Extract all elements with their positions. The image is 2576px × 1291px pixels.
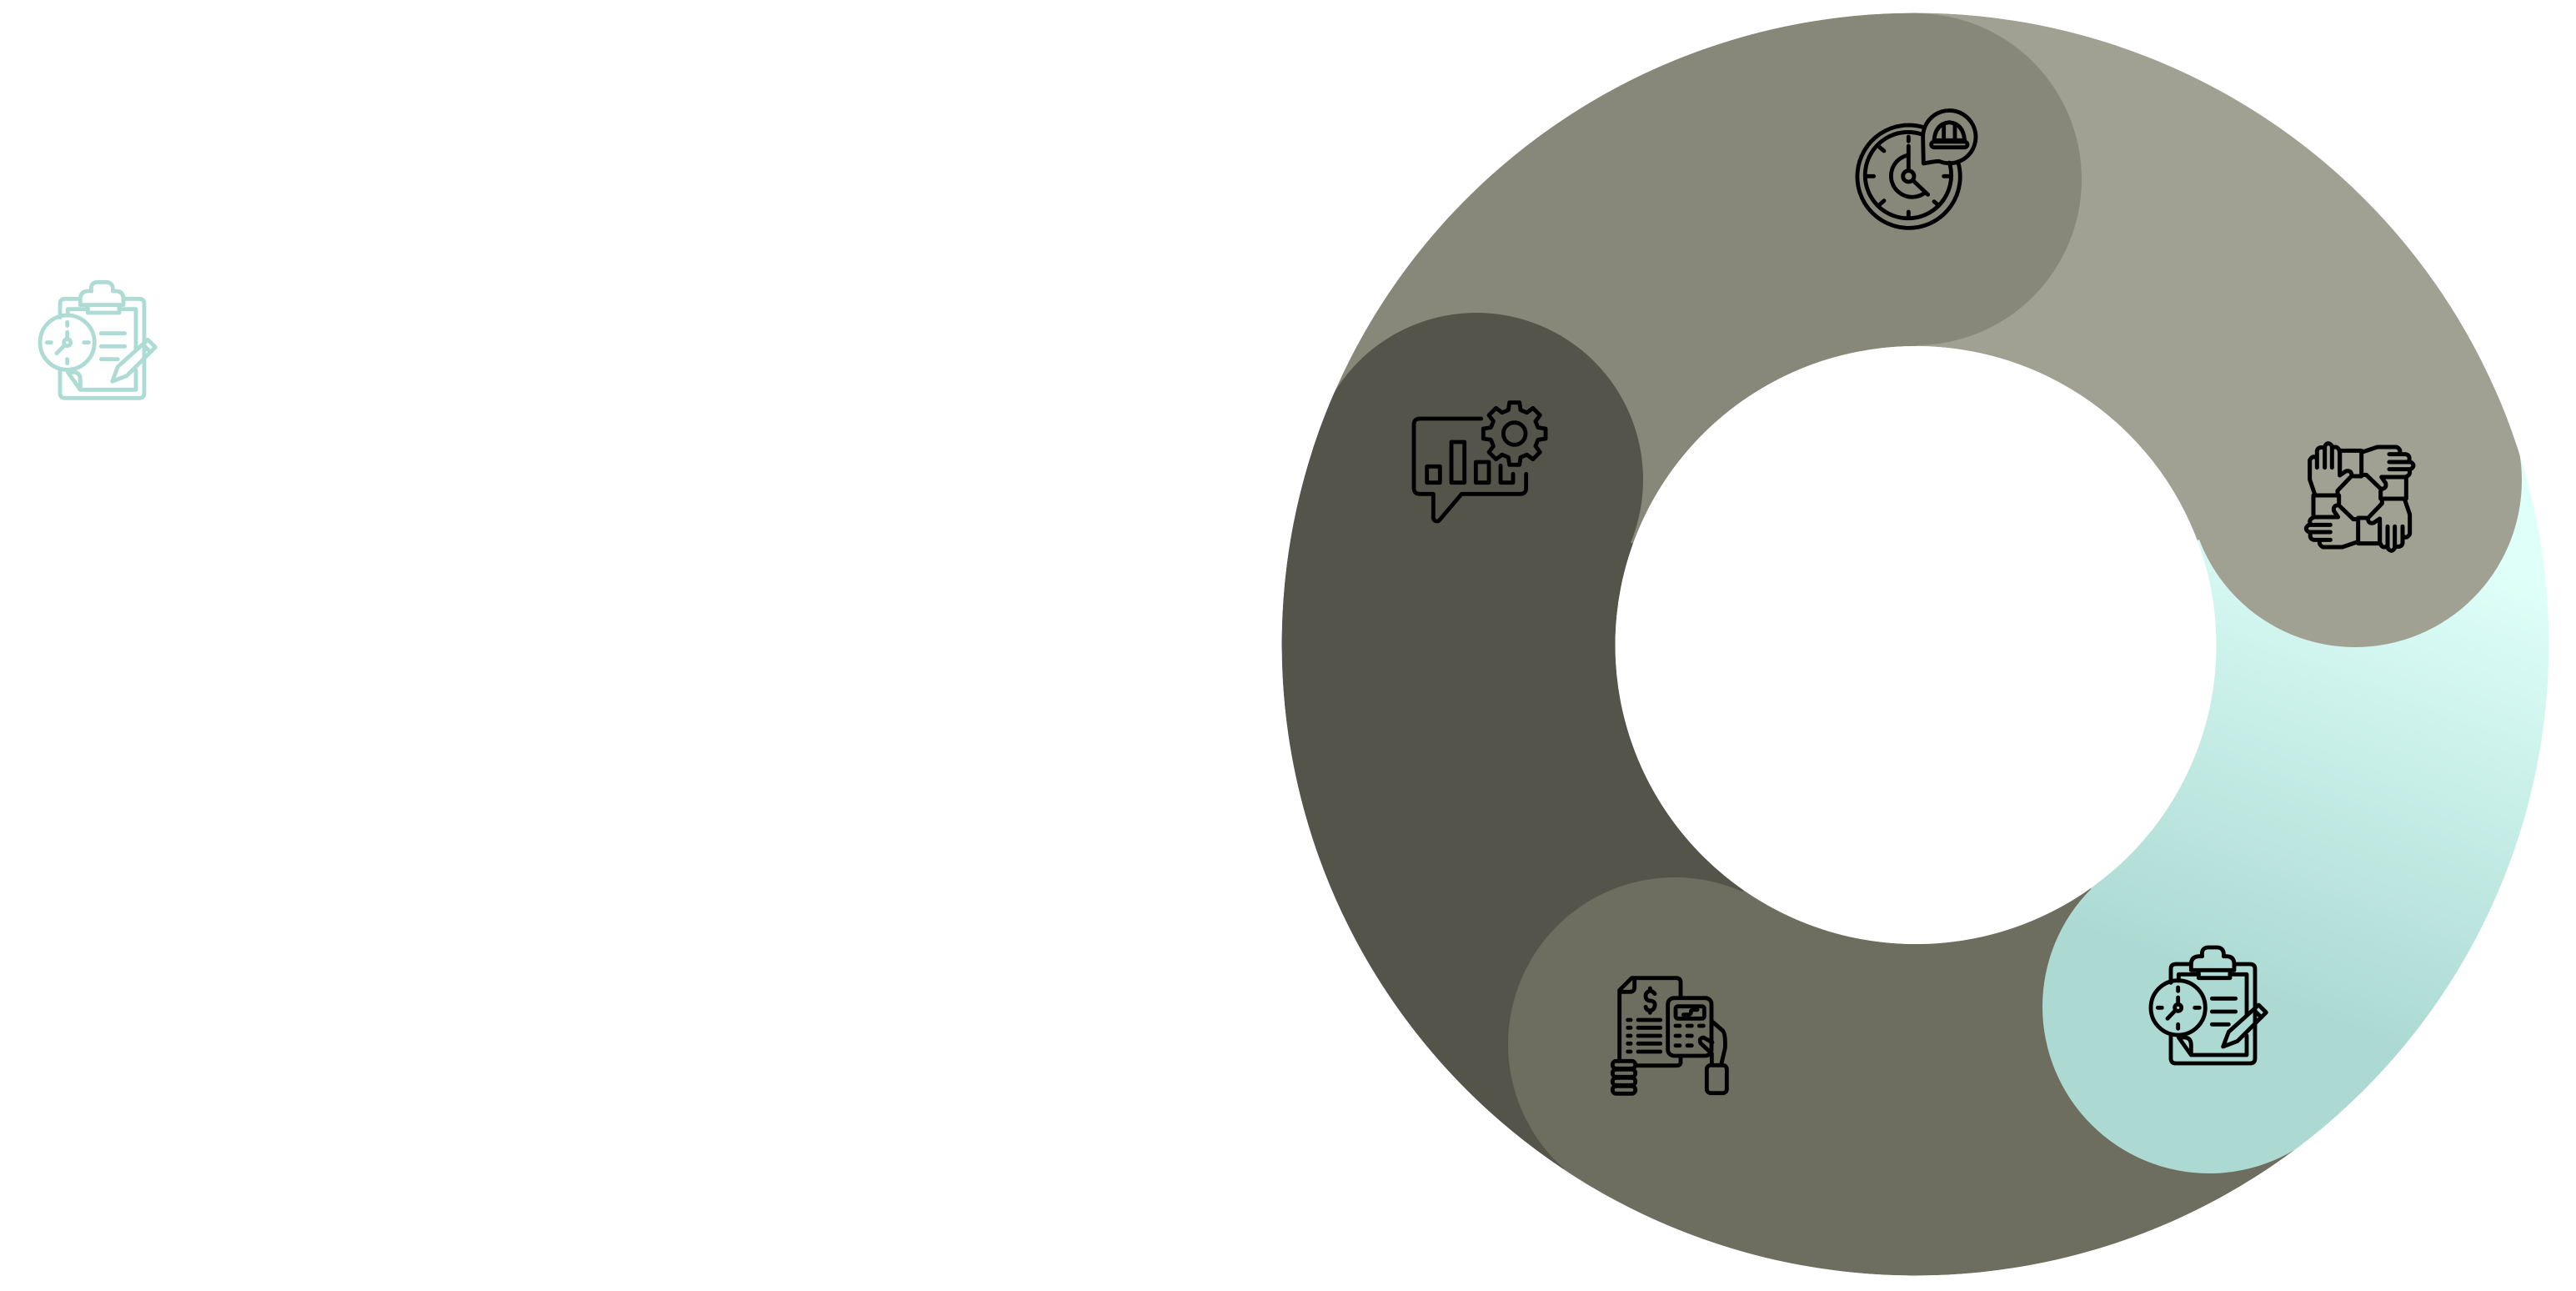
icon: clipboard with clock xyxy=(2151,947,2266,1063)
donut ring xyxy=(1281,13,2548,1275)
segment: grey band with rounded cap, upper right xyxy=(1916,13,2522,647)
segment: dark band with rounded cap, left xyxy=(1281,313,1744,1169)
icon: clock with hard hat xyxy=(1857,110,1976,228)
icon: four linked hands xyxy=(2306,444,2413,550)
segment cap: tan band rounded end, top xyxy=(1916,13,2082,345)
segment: mint gradient band with rounded cap, lower right xyxy=(2042,424,2548,1173)
segment: tan band, upper left xyxy=(1322,13,1916,544)
segment: olive band with rounded cap, bottom xyxy=(1508,877,2298,1275)
icon: chart speech bubble with gear xyxy=(1414,403,1546,521)
icon: clipboard with clock (faded, top left) xyxy=(40,282,155,398)
icon: invoice, calculator and coins xyxy=(1612,978,1727,1093)
